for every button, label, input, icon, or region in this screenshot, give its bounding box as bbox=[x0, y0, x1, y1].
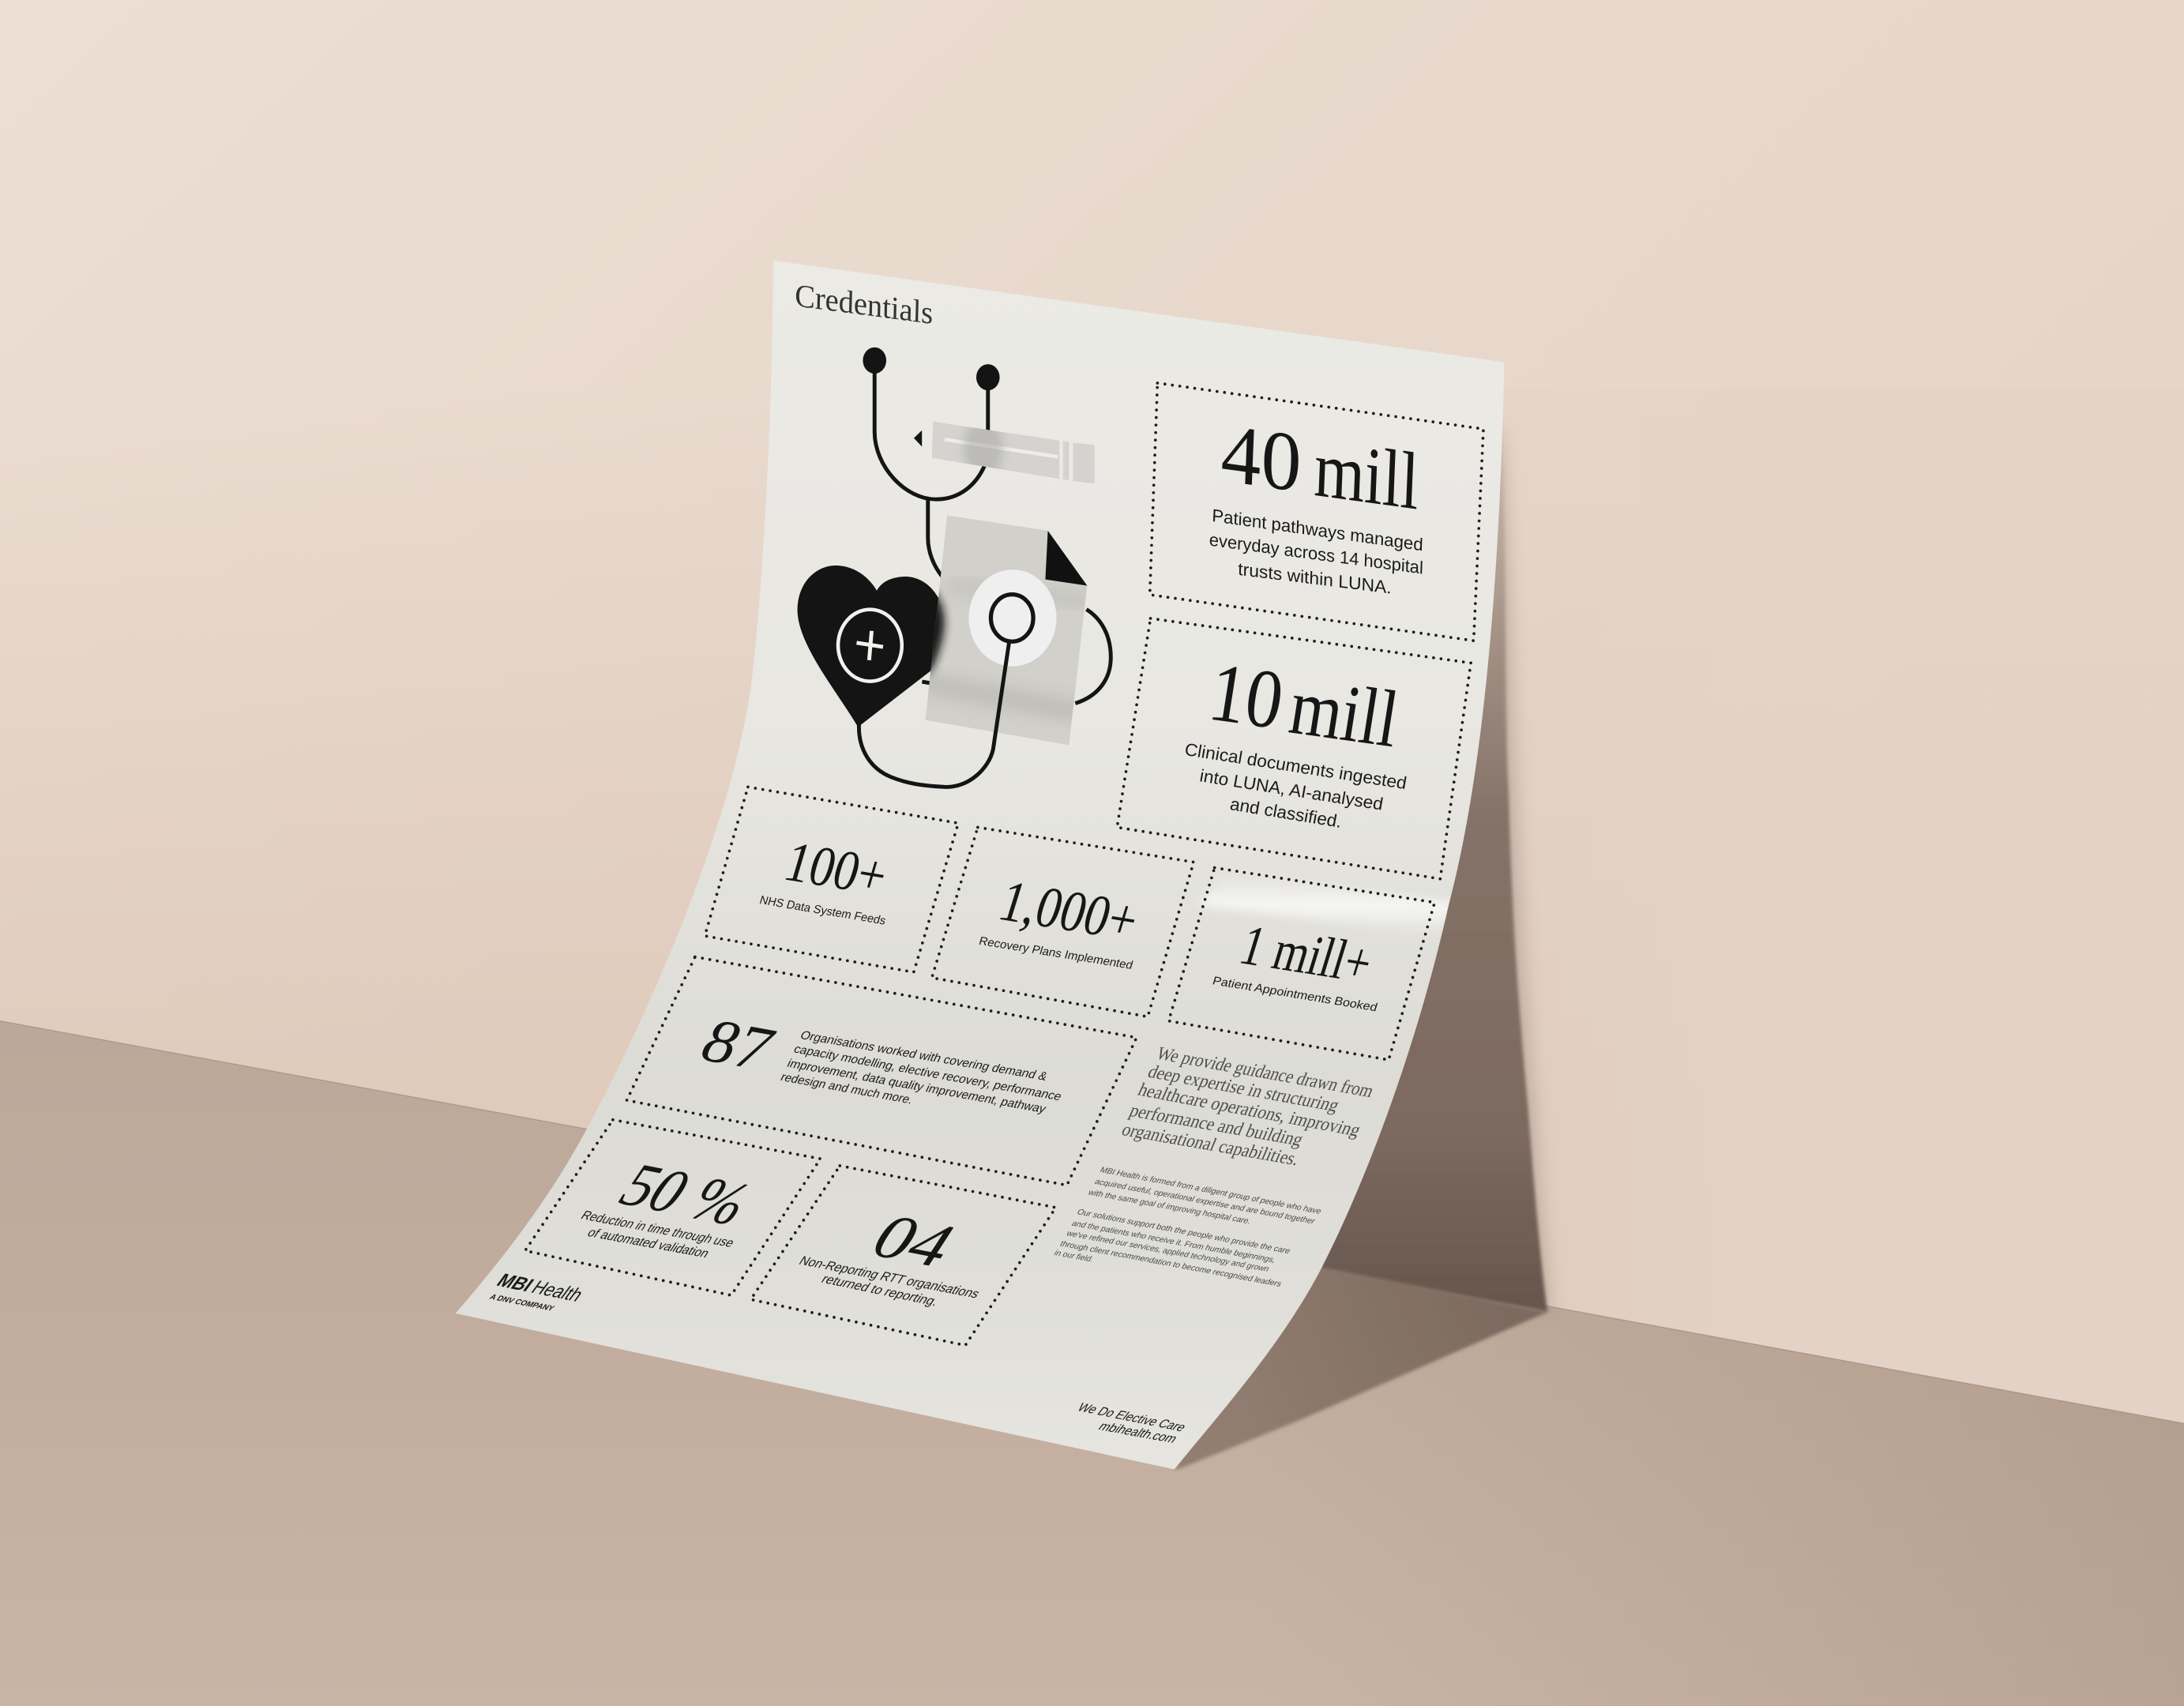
panel: 87 organisations: 87 bbox=[690, 1007, 785, 1083]
description: Organisations worked with covering demand & bbox=[798, 1029, 1050, 1084]
panel: 100+ bbox=[705, 787, 958, 972]
intro paragraph: healthcare operations, improving bbox=[1135, 1080, 1364, 1140]
intro paragraph: deep expertise in structuring bbox=[1145, 1062, 1343, 1116]
chest piece bbox=[859, 569, 1057, 787]
logo: MBI Health: MBI bbox=[492, 1269, 539, 1295]
heart plus symbol bbox=[838, 610, 902, 682]
tube stub bbox=[922, 682, 930, 683]
intro paragraph bbox=[1118, 1043, 1378, 1170]
panel: 04 bbox=[750, 1166, 1056, 1345]
description: Reduction in time through use bbox=[578, 1208, 737, 1250]
poster sheet bbox=[456, 261, 1504, 1469]
logo: MBI Health: A DNV COMPANY bbox=[487, 1294, 556, 1313]
heart bbox=[798, 566, 945, 727]
panel: 100+: 100+ bbox=[778, 829, 895, 907]
panel: 50%: 50 % bbox=[606, 1152, 765, 1238]
body copy bbox=[1052, 1166, 1323, 1289]
panel: 10 mill bbox=[1117, 618, 1471, 879]
title: Credentials bbox=[795, 277, 934, 331]
body copy: Our solutions support both the people who provide the care bbox=[1075, 1208, 1292, 1256]
body copy: we've refined our services, applied technology and grown bbox=[1064, 1229, 1271, 1274]
background: floor bbox=[0, 1021, 2184, 1706]
panel: 40 mill bbox=[1150, 383, 1483, 641]
right tube loop bbox=[1075, 609, 1111, 704]
label: Recovery Plans Implemented bbox=[977, 935, 1134, 972]
paper shadow on floor bbox=[1175, 1262, 1547, 1471]
paper shadow on wall bbox=[1316, 418, 1551, 1312]
body copy: and the patients who receive it. From humble beginnings, bbox=[1070, 1219, 1277, 1264]
panel: 1 mill+: 1 mill+ bbox=[1233, 913, 1380, 995]
description: into LUNA, AI-analysed bbox=[1198, 765, 1385, 814]
body copy: acquired useful, operational expertise and are bound together bbox=[1093, 1177, 1318, 1226]
logo: MBI Health: Health bbox=[527, 1276, 588, 1306]
illustration: stethoscope, heart, document and pencil bbox=[798, 348, 1111, 787]
panel: 40 mill: mill bbox=[1313, 424, 1420, 528]
footer: tagline and url: mbihealth.com bbox=[1096, 1419, 1181, 1445]
description: returned to reporting. bbox=[818, 1272, 942, 1309]
description bbox=[1183, 739, 1408, 832]
intro paragraph: performance and building bbox=[1126, 1100, 1306, 1150]
footer: tagline and url: We Do Elective Care bbox=[1074, 1400, 1190, 1434]
intro paragraph: organisational capabilities. bbox=[1118, 1119, 1303, 1170]
body copy: in our field. bbox=[1052, 1249, 1096, 1264]
panel: 04: 04 bbox=[858, 1203, 969, 1280]
panel: 10 mill: mill bbox=[1284, 662, 1404, 765]
description: of automated validation bbox=[585, 1226, 712, 1261]
panel: 1 mill+ bbox=[1168, 868, 1434, 1060]
panel: 87 organisations bbox=[627, 956, 1137, 1186]
panel: 1,000+ bbox=[932, 827, 1193, 1016]
description: trusts within LUNA. bbox=[1238, 559, 1392, 598]
panel: 10 mill: 10 bbox=[1204, 645, 1289, 746]
description: Non-Reporting RTT organisations bbox=[796, 1253, 983, 1301]
description: Clinical documents ingested bbox=[1183, 739, 1408, 793]
description: and classified. bbox=[1228, 794, 1344, 832]
description: improvement, data quality improvement, pathway bbox=[785, 1057, 1048, 1116]
description bbox=[778, 1029, 1064, 1116]
panel: 1,000+: 1,000+ bbox=[992, 870, 1146, 953]
description: Patient pathways managed bbox=[1212, 505, 1423, 554]
stethoscope tubes bbox=[863, 348, 1000, 577]
description bbox=[1209, 505, 1423, 598]
body copy: with the same goal of improving hospital care. bbox=[1085, 1188, 1253, 1226]
description: redesign and much more. bbox=[778, 1071, 915, 1107]
body copy: through client recommendation to become recognised leaders bbox=[1058, 1239, 1284, 1289]
description: everyday across 14 hospital bbox=[1209, 530, 1423, 578]
logo: MBI Health bbox=[487, 1269, 588, 1313]
description: capacity modelling, elective recovery, performance bbox=[791, 1043, 1064, 1103]
pencil bbox=[914, 418, 1095, 483]
document bbox=[926, 515, 1087, 746]
glossy highlight bbox=[1201, 885, 1450, 926]
panel: 40 mill: 40 bbox=[1220, 406, 1303, 509]
label: NHS Data System Feeds bbox=[758, 894, 887, 928]
label: Patient Appointments Booked bbox=[1211, 975, 1379, 1014]
intro paragraph: We provide guidance drawn from bbox=[1153, 1043, 1378, 1102]
body copy: MBI Health is formed from a diligent group of people who have bbox=[1098, 1166, 1323, 1216]
panel: 50% bbox=[525, 1120, 821, 1295]
